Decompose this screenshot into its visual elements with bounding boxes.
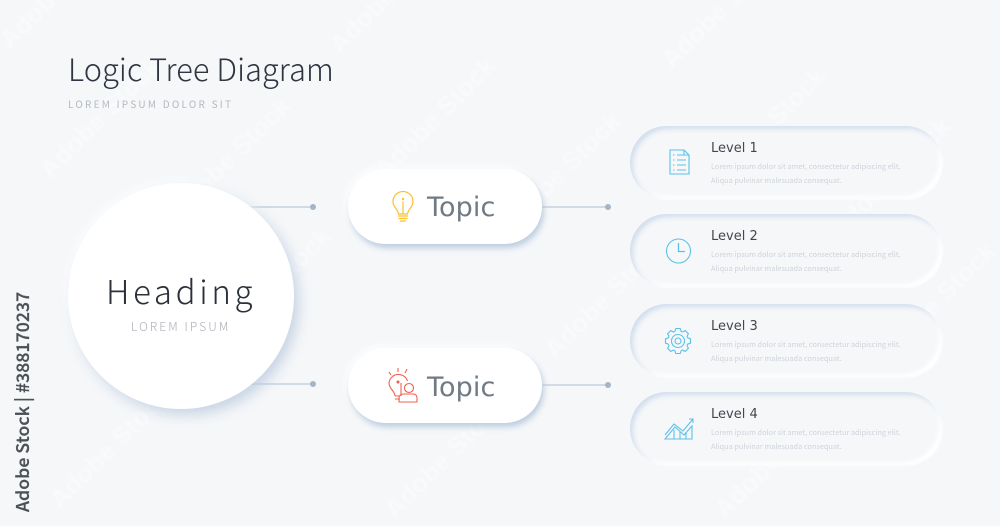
panel: level 3: [630, 304, 942, 377]
watermark: repeated stock marks: Adobe Stock: [368, 50, 502, 184]
level body line 1: Lorem ipsum dolor sit amet, consectetur adipiscing elit.: [711, 339, 901, 350]
icon: idea person: [388, 368, 418, 402]
watermark: repeated stock marks: Adobe Stock: [823, 110, 957, 244]
level body line 2: Aliqua pulvinar malesuada consequat.: [711, 175, 842, 186]
level heading: Level 3: [711, 319, 758, 334]
level body line 2: Aliqua pulvinar malesuada consequat.: [711, 263, 842, 274]
connector: heading to lower topic: [251, 381, 316, 387]
icon: clock: [666, 238, 692, 264]
connector: lower topic to levels: [542, 382, 611, 388]
level body line 1: Lorem ipsum dolor sit amet, consectetur adipiscing elit.: [711, 427, 901, 438]
watermark: repeated stock marks: Adobe Stock: [33, 50, 167, 184]
watermark: repeated stock marks: Adobe Stock: [493, 105, 627, 239]
connector: upper topic to levels: [542, 204, 611, 210]
subtitle: LOREM IPSUM DOLOR SIT: [68, 96, 233, 111]
watermark: repeated stock marks: Adobe Stock: [163, 90, 297, 224]
panel: level 2: [630, 214, 942, 287]
icon: light bulb: [392, 191, 414, 222]
panel: level 4: [630, 392, 942, 465]
icon: gear: [664, 328, 692, 354]
level heading: Level 2: [711, 229, 758, 244]
watermark: repeated stock marks: Adobe Stock: [378, 390, 512, 524]
heading subtext: LOREM IPSUM: [131, 318, 230, 335]
level heading: Level 1: [711, 141, 758, 156]
watermark: repeated stock marks: Adobe Stock: [538, 230, 672, 364]
icon: document: [669, 150, 690, 174]
watermark: repeated stock marks: Adobe Stock: [43, 380, 177, 514]
vertical stock credit: Adobe Stock | #388170237: [10, 292, 35, 512]
connector: heading to upper topic: [250, 204, 316, 210]
panel: heading circle: [68, 183, 294, 409]
watermark: repeated stock marks: Adobe Stock: [708, 390, 842, 524]
watermark: repeated stock marks: Adobe Stock: [203, 220, 337, 354]
panel: level 1: [630, 126, 942, 199]
panel: upper topic: [348, 169, 542, 244]
watermark: repeated stock marks: Adobe Stock: [868, 235, 1000, 369]
level body line 2: Aliqua pulvinar malesuada consequat.: [711, 353, 842, 364]
icon: growth chart: [664, 418, 694, 440]
level body line 1: Lorem ipsum dolor sit amet, consectetur adipiscing elit.: [711, 161, 901, 172]
topic label: Topic: [427, 192, 495, 223]
level body line 1: Lorem ipsum dolor sit amet, consectetur adipiscing elit.: [711, 249, 901, 260]
watermark: repeated stock marks: Adobe Stock: [698, 60, 832, 194]
title: Logic Tree Diagram: [68, 45, 334, 90]
level heading: Level 4: [711, 407, 758, 422]
topic label: Topic: [427, 372, 495, 403]
level body line 2: Aliqua pulvinar malesuada consequat.: [711, 441, 842, 452]
panel: lower topic: [348, 348, 542, 423]
heading text: Heading: [106, 266, 256, 314]
